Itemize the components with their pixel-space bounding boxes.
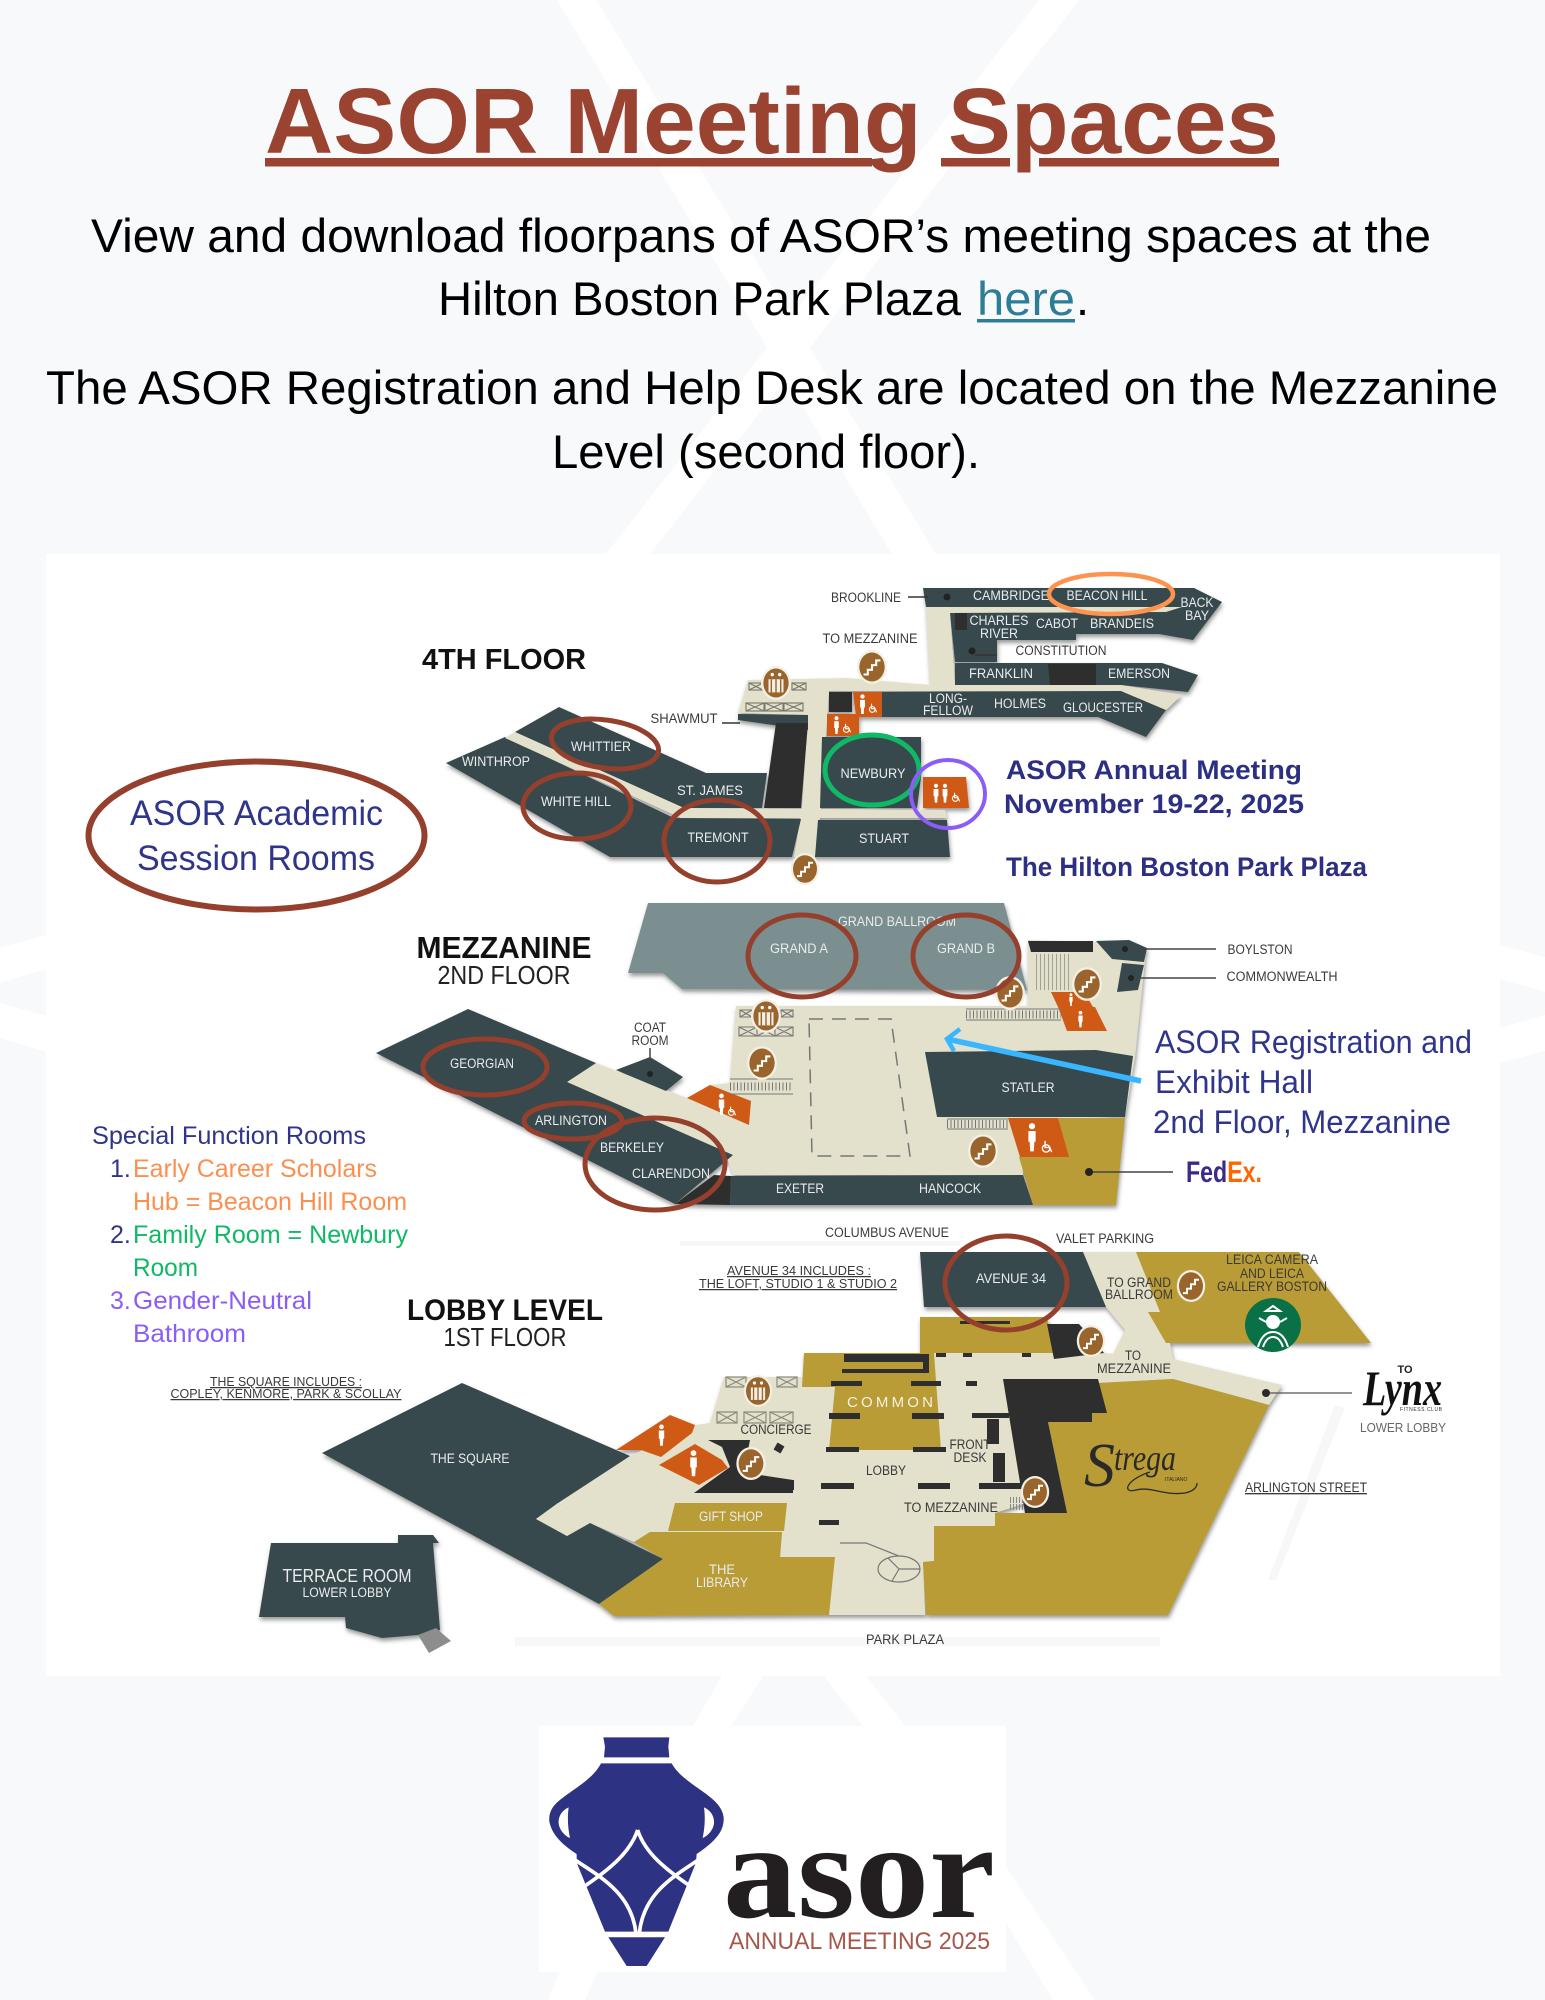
mezzanine floor plan (376, 903, 1338, 1210)
title: ASOR Meeting Spaces (265, 69, 1279, 173)
legend: special function rooms: Early Career Scholars (133, 1155, 377, 1183)
footer logo (539, 1726, 1006, 1972)
room labels: mezzanine: GEORGIAN (450, 1056, 514, 1071)
room labels: mezzanine: ROOM (632, 1033, 668, 1048)
room labels: 4th floor: LONG- (929, 691, 967, 706)
logo: Starbucks (1245, 1298, 1301, 1352)
room labels: lobby level: THE (709, 1562, 735, 1577)
room labels: mezzanine: BERKELEY (600, 1140, 664, 1155)
icon: blue amphora (549, 1737, 724, 1966)
room labels: 4th floor: CABOT (1036, 616, 1078, 631)
room labels: lobby level: THE SQUARE (430, 1451, 510, 1466)
intro text: floorplans: View and download floorpans of ASOR’s meeting spaces at the (91, 209, 1431, 262)
room labels: lobby level: COPLEY, KENMORE, PARK & SCOLLAY (170, 1387, 402, 1401)
floor details: dashed exhibit hall and stair stripes (730, 972, 1071, 1156)
callout: academic session rooms legend (88, 762, 424, 910)
room labels: lobby level: AVENUE 34 INCLUDES : (727, 1264, 871, 1278)
logo: Lynx fitness club: Lynx (1362, 1360, 1442, 1416)
room labels: 4th floor: RIVER (980, 626, 1018, 641)
intro text: floorplans (91, 209, 1431, 325)
room labels: mezzanine: HANCOCK (919, 1181, 981, 1196)
room labels: lobby level: LEICA CAMERA (1226, 1252, 1318, 1267)
callout: registration and exhibit hall (1153, 1024, 1472, 1140)
room labels: mezzanine: STATLER (1002, 1080, 1055, 1095)
room labels: 4th floor: TREMONT (688, 830, 748, 845)
room labels: lobby level: TERRACE ROOM (282, 1566, 412, 1586)
room labels: 4th floor: CAMBRIDGE (973, 588, 1049, 603)
callout: meeting dates and venue: ASOR Annual Meeting (1006, 755, 1302, 785)
room labels: lobby level (170, 1225, 1367, 1647)
callout: academic session rooms legend: Session Rooms (137, 839, 375, 878)
legend: special function rooms: Room (133, 1254, 198, 1282)
room labels: 4th floor: STUART (859, 831, 909, 846)
legend: special function rooms: 1. (110, 1155, 131, 1183)
legend: special function rooms: Gender-Neutral (133, 1287, 312, 1315)
room labels: 4th floor: FELLOW (923, 703, 973, 718)
room labels: lobby level: COLUMBUS AVENUE (825, 1225, 949, 1240)
legend: special function rooms: Hub = Beacon Hill Room (133, 1188, 407, 1216)
legend: special function rooms: Bathroom (133, 1320, 246, 1348)
legend: special function rooms: 2. (110, 1221, 131, 1249)
room labels: lobby level: THE SQUARE INCLUDES : (210, 1375, 362, 1389)
room labels: 4th floor: TO MEZZANINE (822, 631, 918, 646)
room labels: 4th floor: FRANKLIN (969, 666, 1033, 681)
callout: registration and exhibit hall: 2nd Floor, Mezzanine (1153, 1104, 1451, 1140)
logo: FedEx: FedEx. (1186, 1156, 1262, 1189)
room labels: lobby level: THE LOFT, STUDIO 1 & STUDIO 2 (699, 1277, 897, 1291)
room labels: 4th floor: EMERSON (1108, 666, 1170, 681)
room labels: mezzanine (416, 914, 1338, 1196)
floor details: pillars, desks, elevators and entrance (418, 1321, 1031, 1653)
callout: meeting dates and venue: The Hilton Boston Park Plaza (1006, 852, 1368, 882)
rooms: 4th floor shapes (446, 588, 1222, 857)
arrow: to exhibit hall (947, 1029, 1141, 1081)
room labels: lobby level: AND LEICA (1240, 1266, 1304, 1281)
room labels: lobby level: 1ST FLOOR (444, 1322, 566, 1352)
room labels: mezzanine: EXETER (776, 1181, 824, 1196)
room labels: mezzanine: BOYLSTON (1228, 942, 1292, 957)
highlight circles: 4th floor (523, 574, 1173, 882)
highlight circle: Avenue 34 (945, 1236, 1067, 1330)
logo tagline: ANNUAL MEETING 2025 (729, 1928, 990, 1955)
room labels: mezzanine: GRAND A (770, 941, 828, 956)
room labels: lobby level: GALLERY BOSTON (1217, 1279, 1327, 1294)
room labels: 4th floor: WINTHROP (462, 754, 530, 769)
room labels: lobby level: BALLROOM (1105, 1287, 1173, 1302)
room labels: 4th floor: WHITTIER (571, 739, 631, 754)
panel: floor plan map (46, 554, 1500, 1676)
room labels: 4th floor: WHITE HILL (541, 794, 611, 809)
rooms: mezzanine shapes (376, 903, 1147, 1205)
intro text: registration location: The ASOR Registration and Help Desk are located on the Mezzanine (46, 361, 1498, 414)
room labels: mezzanine: ARLINGTON (535, 1113, 607, 1128)
room labels: 4th floor: BRANDEIS (1090, 616, 1154, 631)
logo: Lynx fitness club: LOWER LOBBY (1360, 1420, 1446, 1435)
room labels: lobby level: COMMON (847, 1394, 933, 1411)
room labels: lobby level: TO MEZZANINE (904, 1500, 998, 1515)
room labels: lobby level: LOBBY (866, 1463, 906, 1478)
room labels: mezzanine: COAT (634, 1020, 666, 1035)
callout: academic session rooms legend: ASOR Academic (130, 794, 383, 833)
intro text: floorplans: . (1076, 272, 1089, 325)
room labels: lobby level: MEZZANINE (1097, 1361, 1171, 1376)
room labels: lobby level: ARLINGTON STREET (1245, 1480, 1367, 1495)
elevator boxes: 4th floor (746, 683, 806, 711)
highlight circles: mezzanine (423, 915, 1019, 1210)
room labels: lobby level: PARK PLAZA (866, 1632, 944, 1647)
4th floor plan (422, 574, 1222, 885)
callout: meeting dates and venue (1004, 755, 1368, 882)
intro text: registration location: Level (second floor). (552, 425, 980, 478)
logo: Lynx fitness club: FITNESS CLUB (1400, 1407, 1443, 1413)
room labels: 4th floor: CONSTITUTION (1016, 643, 1106, 658)
room labels: lobby level: LOBBY LEVEL (407, 1294, 603, 1327)
rooms: lobby level shapes (259, 1252, 1371, 1638)
room labels: lobby level: DESK (954, 1450, 986, 1465)
room labels: lobby level: TO GRAND (1107, 1275, 1171, 1290)
room labels: 4th floor (422, 588, 1214, 846)
room labels: mezzanine: COMMONWEALTH (1226, 969, 1338, 984)
legend: special function rooms: Special Function Rooms (92, 1122, 366, 1150)
callout: meeting dates and venue: November 19-22, 2025 (1004, 789, 1304, 819)
room labels: 4th floor: ST. JAMES (677, 783, 743, 798)
logo: Strega restaurant: S (1084, 1432, 1115, 1500)
icons: lobby restrooms, stairs, elevator (659, 1270, 1205, 1508)
room labels: lobby level: VALET PARKING (1056, 1231, 1154, 1246)
logo: Lynx fitness club: TO (1397, 1364, 1413, 1376)
room labels: lobby level: GIFT SHOP (699, 1509, 763, 1524)
room labels: mezzanine: 2ND FLOOR (438, 960, 570, 990)
room labels: 4th floor: NEWBURY (840, 766, 906, 781)
room labels: 4th floor: BROOKLINE (831, 590, 901, 605)
room labels: 4th floor: HOLMES (994, 696, 1046, 711)
callout: registration and exhibit hall: ASOR Registration and (1155, 1024, 1472, 1060)
intro text: registration location (46, 361, 1498, 478)
logo wordmark: asor (723, 1797, 995, 1947)
room labels: mezzanine: GRAND B (937, 941, 995, 956)
faint street bands (515, 1241, 1345, 1646)
room labels: 4th floor: BAY (1185, 608, 1209, 623)
room labels: 4th floor: CHARLES (970, 613, 1028, 628)
room labels: lobby level: TO (1125, 1348, 1141, 1363)
legend: special function rooms: Family Room = Newbury (133, 1221, 408, 1249)
room labels: 4th floor: SHAWMUT (650, 711, 718, 726)
logo: Strega restaurant: trega (1114, 1438, 1176, 1478)
room labels: 4th floor: GLOUCESTER (1063, 700, 1143, 715)
room labels: lobby level: FRONT (950, 1437, 990, 1452)
intro text: floorplans: Hilton Boston Park Plaza (438, 272, 962, 325)
lobby level floor plan (170, 1225, 1446, 1653)
legend: special function rooms: 3. (110, 1287, 131, 1315)
callout: registration and exhibit hall: Exhibit Hall (1155, 1064, 1313, 1100)
room labels: lobby level: LOWER LOBBY (302, 1585, 392, 1600)
room labels: lobby level: CONCIERGE (740, 1422, 812, 1437)
room labels: 4th floor: BEACON HILL (1066, 588, 1148, 603)
room labels: 4th floor: 4TH FLOOR (422, 644, 586, 676)
logo: Strega restaurant (1084, 1432, 1197, 1500)
intro text: floorplans: here (977, 272, 1075, 325)
room labels: 4th floor: BACK (1180, 595, 1214, 610)
legend: special function rooms (92, 1122, 408, 1348)
logo: Lynx fitness club (1262, 1360, 1446, 1435)
room labels: mezzanine: MEZZANINE (416, 930, 592, 965)
icons: 4th floor restrooms and stairs (761, 650, 960, 885)
room labels: mezzanine: GRAND BALLROOM (838, 914, 956, 929)
icons: mezzanine restrooms, stairs, elevators (719, 967, 1102, 1168)
room labels: lobby level: AVENUE 34 (976, 1271, 1046, 1286)
room labels: lobby level: LIBRARY (696, 1575, 748, 1590)
room labels: mezzanine: CLARENDON (632, 1166, 710, 1181)
logo: Strega restaurant: ITALIANO (1165, 1477, 1188, 1483)
